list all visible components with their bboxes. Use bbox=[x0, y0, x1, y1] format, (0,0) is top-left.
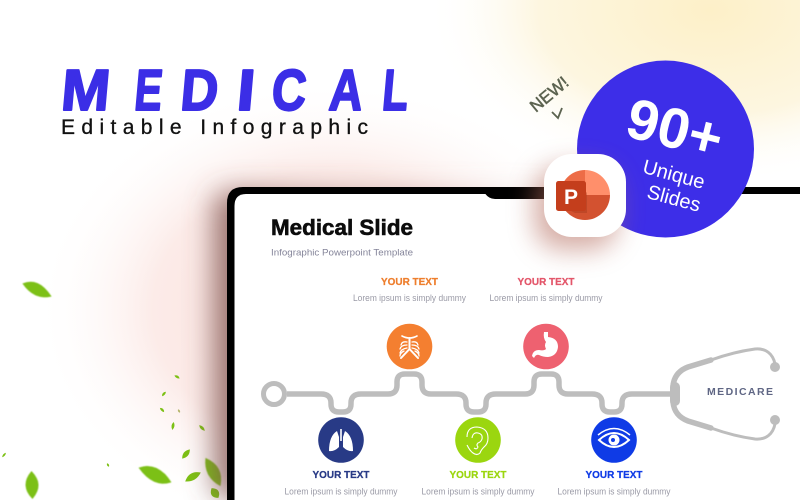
laptop screen frame bbox=[227, 187, 800, 500]
heading: MEDICAL bbox=[59, 57, 411, 123]
heading: MEDICAL: E bbox=[132, 57, 165, 123]
laptop shadow bbox=[214, 192, 800, 500]
navy heading: YOUR TEXT bbox=[312, 469, 370, 481]
icon: eye bbox=[591, 417, 637, 463]
navy description: Lorem ipsum is simply dummy bbox=[284, 486, 398, 496]
subheading: Editable Infographic: Editable Infographic bbox=[61, 116, 368, 139]
lime heading: YOUR TEXT bbox=[450, 469, 507, 481]
NEW! handwritten note: NEW! bbox=[526, 73, 572, 116]
blue description: Lorem ipsum is simply dummy bbox=[558, 486, 671, 496]
PowerPoint icon bbox=[544, 154, 626, 237]
stethoscope label: MEDICARE bbox=[707, 386, 773, 398]
icon shadow bbox=[534, 166, 618, 250]
blue heading: YOUR TEXT bbox=[586, 469, 643, 481]
icon: stomach bbox=[523, 324, 569, 369]
heading: MEDICAL: L bbox=[380, 58, 411, 123]
step: lungs (navy) bbox=[284, 417, 398, 496]
small arrow bbox=[552, 108, 562, 118]
badge number: 90+ bbox=[620, 86, 729, 172]
badge caption line 1: Unique bbox=[640, 156, 707, 194]
slide title: Medical Slide bbox=[271, 215, 413, 240]
screen notch bbox=[485, 194, 640, 199]
red description: Lorem ipsum is simply dummy bbox=[490, 293, 603, 303]
timeline start ring bbox=[264, 384, 284, 404]
icon: ear bbox=[455, 417, 501, 463]
red heading: YOUR TEXT bbox=[518, 276, 575, 288]
orange description: Lorem ipsum is simply dummy bbox=[353, 293, 466, 303]
heading: MEDICAL: I bbox=[235, 58, 258, 122]
icon: lungs bbox=[318, 417, 364, 463]
step: stomach (red) bbox=[490, 276, 603, 369]
slide subtitle: Infographic Powerpoint Template bbox=[271, 248, 413, 258]
stethoscope bbox=[670, 349, 780, 439]
step: ribs (orange) bbox=[353, 276, 466, 369]
step: ear (lime) bbox=[422, 417, 535, 496]
lime description: Lorem ipsum is simply dummy bbox=[422, 486, 535, 496]
step: eye (blue) bbox=[558, 417, 671, 496]
heading: MEDICAL: D bbox=[178, 57, 221, 123]
timeline path bbox=[287, 374, 675, 412]
heading: MEDICAL: C bbox=[269, 59, 309, 123]
heading: MEDICAL: M bbox=[59, 58, 113, 123]
badge caption line 2: Slides bbox=[645, 181, 703, 217]
icon: rib cage bbox=[387, 324, 432, 369]
orange heading: YOUR TEXT bbox=[381, 276, 439, 288]
heading: MEDICAL: A bbox=[327, 58, 366, 123]
badge: 90+ unique slides bbox=[577, 60, 754, 238]
decorative falling leaves bbox=[1, 278, 226, 500]
P letter: P bbox=[564, 186, 578, 209]
